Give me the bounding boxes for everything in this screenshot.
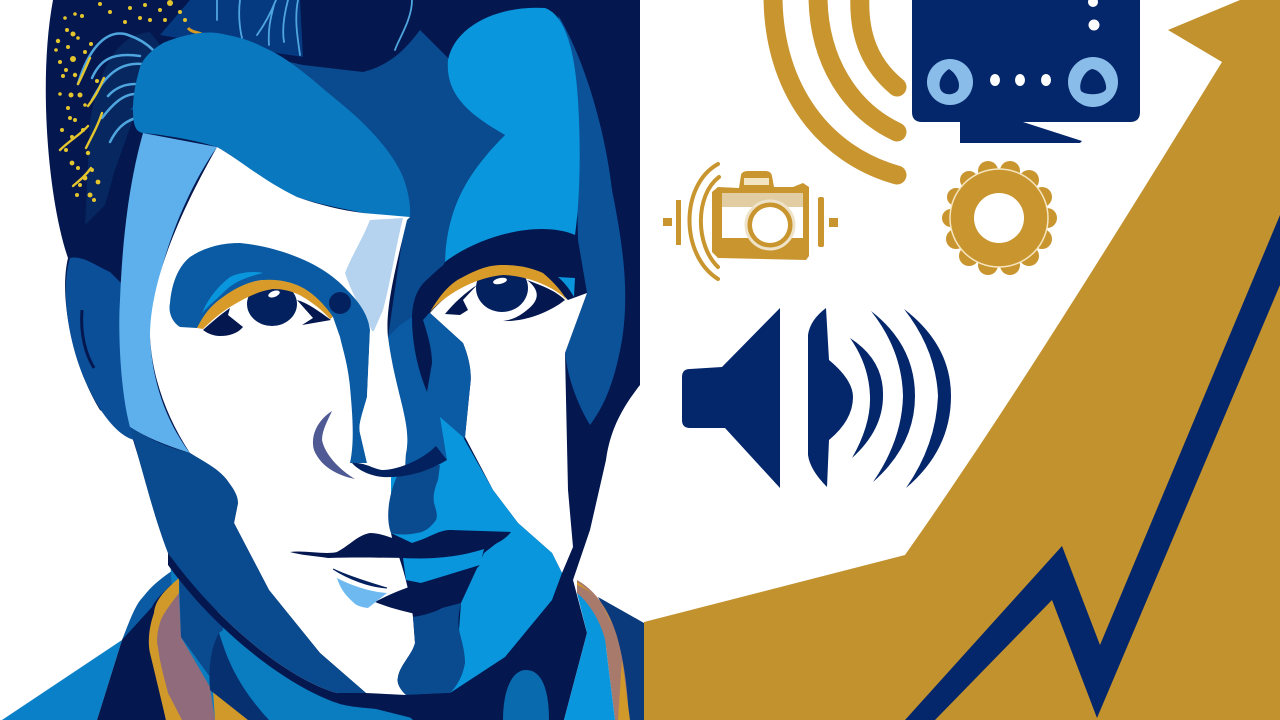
forehead band bbox=[133, 33, 410, 217]
forehead highlight streak bbox=[345, 218, 403, 333]
lower bright cheek bbox=[391, 417, 562, 693]
icon: gear bbox=[942, 161, 1057, 275]
growth arrow: gold area and navy trend line bbox=[644, 0, 1280, 720]
icon: monitor bbox=[912, 0, 1140, 143]
under-nose shadow bbox=[388, 465, 440, 534]
upper lip bbox=[290, 530, 511, 558]
portrait bbox=[2, 0, 644, 720]
left brow and nose side bbox=[169, 243, 370, 463]
icon: sound waves bbox=[773, 0, 897, 175]
left collar bbox=[2, 553, 450, 720]
lower lip bbox=[375, 565, 480, 615]
left brow bright accent bbox=[202, 272, 263, 313]
chin shadow bbox=[397, 603, 465, 695]
nostril shadow bbox=[313, 411, 355, 479]
mouth inner bright bbox=[403, 549, 484, 583]
white face bbox=[150, 147, 415, 695]
right brow and eye lid bbox=[412, 237, 578, 392]
left eye lid and lashes bbox=[197, 280, 351, 336]
forehead right bright blue bbox=[445, 8, 580, 262]
face mid tones bbox=[130, 30, 505, 477]
icon: camera bbox=[663, 164, 838, 279]
nostril line bbox=[352, 446, 447, 477]
right cheek white bbox=[430, 272, 587, 573]
lip highlight bbox=[333, 569, 387, 608]
hair highlights bbox=[54, 0, 412, 225]
jaw line bbox=[168, 553, 450, 720]
nose right shading bbox=[388, 313, 471, 477]
nose bridge white bbox=[359, 330, 407, 470]
left cheek light blue bbox=[119, 133, 217, 453]
right neck oval bbox=[503, 670, 549, 720]
ear bbox=[66, 257, 135, 440]
right collar bbox=[564, 580, 644, 720]
head silhouette bbox=[46, 0, 640, 720]
left eye iris bbox=[247, 282, 297, 326]
right eye iris bbox=[476, 264, 528, 312]
icon: speaker bbox=[682, 308, 951, 488]
left lower cheek shadow bbox=[130, 427, 366, 693]
right hair strip bbox=[558, 15, 625, 425]
